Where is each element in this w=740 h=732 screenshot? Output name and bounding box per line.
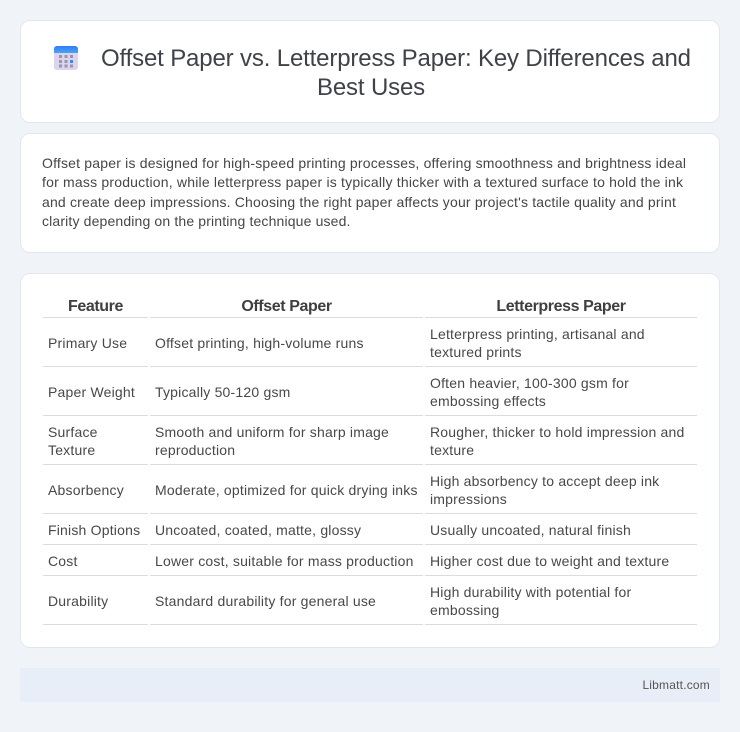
table header: Letterpress Paper: Letterpress Paper [496,298,626,315]
row: Paper Weight: Paper Weight [48,384,135,400]
row: Finish Options: Finish Options [48,522,140,538]
Paper Weight letterpress: Often heavier, 100-300 gsm for [430,375,629,391]
footer bar [20,668,720,702]
Surface Texture letterpress: Rougher, thicker to hold impression and [430,424,684,440]
Absorbency letterpress: High absorbency to accept deep ink [430,473,659,489]
footer credit: Libmatt.com [642,678,710,692]
title: Offset Paper vs. Letterpress Paper: Key Differences and [101,45,691,72]
icon: calendar grid [54,46,78,70]
Durability letterpress [430,584,631,618]
Primary Use letterpress: Letterpress printing, artisanal and [430,326,645,342]
intro text line 1: Offset paper is designed for high-speed printing processes, offering smoothness and brightness ideal [42,155,686,171]
row: Absorbency: Absorbency [48,482,124,498]
panel: intro text [20,133,720,253]
Finish Options offset: Uncoated, coated, matte, glossy [155,522,361,538]
Surface Texture offset: Smooth and uniform for sharp image [155,424,389,440]
Paper Weight letterpress: embossing effects [430,393,546,409]
Primary Use letterpress: textured prints [430,344,522,360]
intro text line 3: and create deep impressions. Choosing the right paper affects your project's tactile quality and print [42,194,676,210]
table header: Offset Paper: Offset Paper [241,298,332,315]
row: Durability: Durability [48,593,108,609]
Absorbency offset: Moderate, optimized for quick drying inks [155,482,418,498]
title second line: Best Uses [317,74,425,101]
Paper Weight offset: Typically 50-120 gsm [155,384,291,400]
Surface Texture offset [155,424,389,458]
Durability letterpress: High durability with potential for [430,584,631,600]
Absorbency letterpress [430,473,660,507]
row: Surface Texture [48,424,98,458]
Surface Texture letterpress: texture [430,442,474,458]
Primary Use offset: Offset printing, high-volume runs [155,335,364,351]
Cost offset: Lower cost, suitable for mass production [155,553,414,569]
Finish Options letterpress: Usually uncoated, natural finish [430,522,631,538]
Paper Weight letterpress [430,375,629,409]
table header: Feature: Feature [68,298,123,315]
Surface Texture letterpress [430,424,684,458]
panel: title card [20,20,720,123]
Durability offset: Standard durability for general use [155,593,376,609]
row: Surface Texture: Texture [48,442,95,458]
panel: comparison table [20,273,720,648]
intro text line 4: clarity depending on the printing technique used. [42,213,351,229]
Absorbency letterpress: impressions [430,491,507,507]
Durability letterpress: embossing [430,602,500,618]
intro text line 2: for mass production, while letterpress paper is typically thicker with a textured surface to hold the ink [42,174,683,190]
Primary Use letterpress [430,326,645,360]
Cost letterpress: Higher cost due to weight and texture [430,553,669,569]
row: Surface Texture: Surface [48,424,98,440]
Surface Texture offset: reproduction [155,442,235,458]
row: Cost: Cost [48,553,78,569]
row: Primary Use: Primary Use [48,335,127,351]
